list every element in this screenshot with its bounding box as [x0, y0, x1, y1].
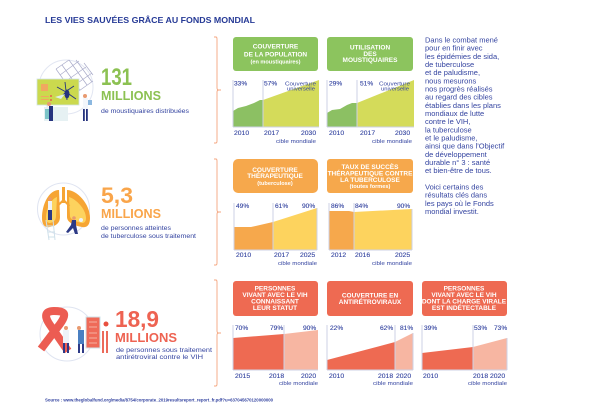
stat: 5,3 millions: 5,3 — [101, 183, 133, 208]
area chart: cible mondiale — [468, 381, 507, 387]
area chart: cible mondiale — [276, 139, 316, 145]
text block: introduction: et bien-être de tous. — [425, 166, 492, 175]
header — [233, 281, 318, 316]
header: (en moustiquaires) — [250, 60, 301, 66]
header — [327, 37, 413, 71]
area chart: 51% — [360, 80, 373, 88]
header: DONT LA CHARGE VIRALE — [422, 298, 507, 306]
header: LA TUBERCULOSE — [340, 177, 401, 184]
stat: 18,9 millions: de personnes sous traitement — [116, 347, 212, 354]
area chart: 2020 — [301, 373, 316, 380]
header: DES — [363, 51, 377, 58]
area chart: universelle — [287, 86, 315, 92]
icon: red ribbon and clinicians — [40, 307, 108, 361]
area chart: 53% — [474, 325, 487, 332]
stat: 5,3 millions: MILLIONS — [101, 207, 161, 221]
header: EST INDÉTECTABLE — [432, 303, 497, 312]
area chart: 2010 — [423, 373, 438, 380]
text block: introduction: et le paludisme, — [425, 134, 478, 142]
panel: treatment coverage — [233, 159, 318, 267]
text block: introduction: nos progrès réalisés — [425, 84, 493, 94]
header: VIVANT AVEC LE VIH — [242, 292, 308, 299]
panel: population coverage — [233, 37, 319, 145]
header — [327, 159, 413, 193]
area chart: 84% — [355, 203, 368, 210]
text block: introduction: durable n° 3 : santé — [425, 158, 490, 167]
area chart: 29% — [329, 80, 342, 88]
header: THÉRAPEUTIQUE CONTRE — [328, 168, 413, 178]
stat: 131 millions: de moustiquaires distribuées — [101, 108, 190, 115]
area chart: Couverture — [379, 82, 410, 88]
text block: introduction: la tuberculose — [425, 125, 472, 134]
header: COUVERTURE EN — [342, 292, 398, 300]
area chart: 2017 — [274, 252, 289, 259]
text block: introduction: nous mesurons — [425, 76, 477, 85]
area chart: 2010 — [236, 252, 251, 259]
stat: 131 millions: 131 — [101, 64, 132, 91]
area chart: 90% — [303, 325, 316, 332]
area chart — [329, 203, 412, 267]
header — [233, 159, 318, 193]
area chart: 33% — [234, 80, 247, 88]
text block: introduction: Voici certains des — [425, 182, 484, 192]
area chart: 2025 — [395, 252, 410, 259]
header: UTILISATION — [350, 44, 390, 52]
panel: malaria summary — [37, 60, 190, 121]
panel: HIV summary — [40, 306, 212, 361]
area chart: 2018 — [269, 373, 284, 380]
area chart: 2010 — [234, 130, 249, 137]
area chart: 61% — [275, 203, 288, 210]
title: LES VIES SAUVÉES GRÂCE AU FONDS MONDIAL — [45, 14, 255, 25]
text block: introduction: au regard des cibles — [425, 93, 493, 102]
header — [233, 37, 318, 71]
stat: 18,9 millions: antirétroviral contre le VIH — [116, 354, 203, 361]
stat: 131 millions — [101, 64, 190, 115]
area chart: 2018 — [378, 373, 393, 380]
area chart: 81% — [400, 325, 413, 332]
area chart: 90% — [302, 203, 315, 210]
header: MOUSTIQUAIRES — [343, 57, 398, 64]
header: VIVANT AVEC LE VIH — [431, 292, 497, 299]
area chart — [233, 80, 319, 145]
header — [422, 281, 507, 316]
text block: introduction: les épidémies de sida, — [425, 52, 499, 61]
area chart: 2030 — [395, 130, 410, 137]
area chart — [327, 325, 413, 387]
header: (tuberculose) — [257, 181, 293, 187]
text block: introduction: de tuberculose — [425, 60, 474, 69]
area chart: 2017 — [264, 130, 279, 137]
stat: 5,3 millions: de tuberculose sous traitement — [101, 233, 196, 240]
area chart: 57% — [264, 80, 277, 88]
header: COUVERTURE — [253, 44, 299, 50]
area chart: 2017 — [360, 130, 375, 137]
area chart: 2010 — [329, 130, 344, 137]
area chart: 79% — [270, 325, 283, 332]
area chart: 2012 — [331, 252, 346, 259]
area chart: 2030 — [301, 130, 316, 137]
area chart: cible mondiale — [373, 381, 413, 387]
stat: 131 millions: MILLIONS — [101, 88, 161, 103]
area chart — [234, 203, 317, 267]
area chart: 2016 — [355, 252, 370, 259]
stat: 18,9 millions: 18,9 — [115, 306, 159, 332]
text block: introduction: les pays où le Fonds — [425, 199, 494, 208]
area chart: 90% — [397, 203, 410, 210]
area chart: 73% — [494, 325, 507, 332]
header: COUVERTURE — [252, 167, 298, 174]
text block: introduction: et de paludisme, — [425, 68, 480, 77]
stat: 5,3 millions — [101, 183, 196, 240]
header — [327, 281, 413, 316]
text block: introduction: de développement — [425, 150, 488, 159]
area chart: cible mondiale — [372, 139, 412, 145]
header: LEUR STATUT — [253, 305, 297, 312]
header: TAUX DE SUCCÈS — [342, 162, 399, 171]
area chart — [422, 325, 507, 387]
area chart: 86% — [331, 203, 344, 210]
area chart — [233, 325, 318, 387]
source note: Source : www.theglobalfund.org/media/8754/corporate_2019resultsreport_report_fr.pdf?u=637045670120000000 — [45, 398, 274, 402]
header: DE LA POPULATION — [244, 52, 307, 58]
panel: tuberculosis summary — [38, 183, 196, 240]
header: THÉRAPEUTIQUE — [247, 171, 303, 180]
header: ANTIRÉTROVIRAUX — [339, 297, 402, 306]
bracket: tuberculosis — [214, 159, 221, 265]
area chart: cible mondiale — [278, 261, 317, 267]
area chart: 2020 — [396, 373, 411, 380]
area chart: universelle — [381, 86, 409, 92]
area chart: 2018 — [473, 373, 488, 380]
stat: 18,9 millions: MILLIONS — [115, 330, 177, 345]
bracket: malaria — [214, 37, 221, 143]
header: PERSONNES — [255, 286, 296, 292]
bracket: HIV — [214, 280, 221, 386]
header: CONNAISSANT — [251, 298, 299, 306]
area chart: 62% — [380, 325, 393, 332]
text block: introduction: résultats clés dans — [425, 191, 487, 200]
area chart: 70% — [235, 325, 248, 332]
header: (toutes formes) — [350, 184, 390, 190]
area chart: 2010 — [329, 373, 344, 380]
area chart: cible mondiale — [279, 381, 318, 387]
header: PERSONNES — [444, 286, 485, 292]
icon: mosquito net and scientists — [37, 60, 93, 121]
area chart: 2020 — [490, 373, 505, 380]
area chart: cible mondiale — [372, 261, 412, 267]
panel: people who know status — [233, 281, 318, 387]
area chart: 39% — [424, 325, 437, 332]
text block: introduction: Dans le combat mené — [425, 36, 498, 44]
panel: net use — [327, 37, 414, 145]
panel: treatment success — [327, 159, 413, 267]
area chart: 2015 — [235, 373, 250, 380]
area chart: 2025 — [300, 252, 315, 259]
area chart: 49% — [236, 203, 249, 210]
area chart: 22% — [330, 325, 343, 332]
area chart: Couverture — [285, 82, 316, 88]
panel: antiretroviral coverage — [327, 281, 413, 387]
icon: lungs and doctors — [38, 183, 90, 240]
area chart — [327, 80, 414, 145]
text block: introduction: pour en finir avec — [425, 44, 483, 53]
text block: introduction: ainsi que dans l’Objectif — [425, 142, 505, 151]
text block: introduction: mondiaux de lutte — [425, 109, 484, 118]
panel: suppressed viral load — [422, 281, 507, 387]
stat: 18,9 millions — [115, 306, 212, 361]
text block: introduction: établies dans les plans — [425, 101, 501, 110]
text block: introduction: mondial investit. — [425, 207, 479, 216]
stat: 5,3 millions: de personnes atteintes — [101, 225, 172, 232]
text block: introduction: contre le VIH, — [425, 117, 470, 126]
